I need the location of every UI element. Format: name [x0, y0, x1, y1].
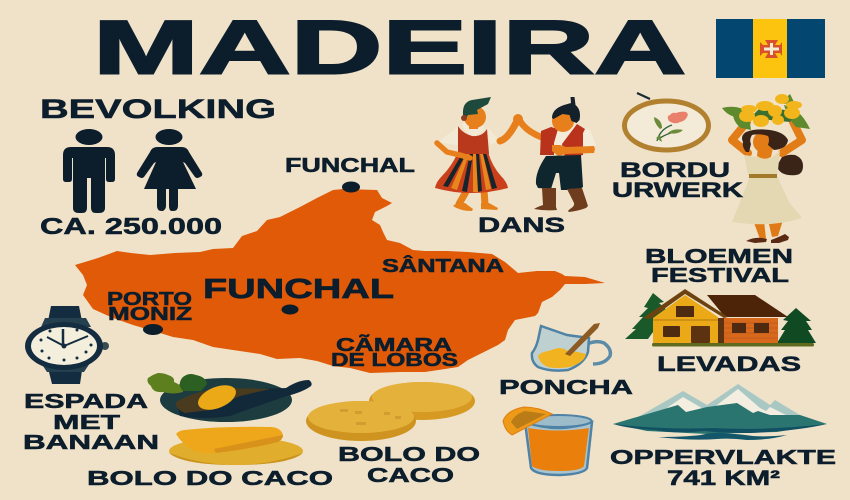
map dot: Porto Moniz — [143, 324, 163, 335]
icon: poncha jug — [532, 323, 610, 371]
icon: dancers — [435, 97, 596, 212]
label: espada met banaan: BANAAN — [23, 432, 159, 454]
map label: Camara de Lobos: CÃMARA — [336, 334, 452, 355]
map dot: Funchal — [282, 304, 298, 314]
icon: man — [63, 129, 115, 213]
icon: woman with flowers — [722, 94, 810, 243]
map label: Porto Moniz — [107, 288, 192, 324]
label: poncha: PONCHA — [499, 377, 633, 399]
icon: bolo do caco, stacked — [306, 382, 475, 441]
map: Madeira island — [75, 182, 605, 373]
label: bloemen festival: FESTIVAL — [651, 264, 789, 287]
label: oppervlakte: 741 KM² — [667, 467, 780, 490]
label: bolo do caco right: BOLO DO — [338, 443, 480, 466]
flower bouquet — [722, 94, 810, 130]
icon: flag of Madeira — [716, 19, 825, 78]
label: oppervlakte: OPPERVLAKTE — [610, 446, 836, 469]
label: espada met banaan: MET — [53, 412, 120, 434]
map label: Porto Moniz: MONIZ — [108, 303, 192, 324]
title: MADEIRA — [93, 6, 686, 90]
label: borduurwerk: URWERK — [612, 179, 743, 202]
icon: orange drink — [503, 407, 592, 475]
label: bolo do caco right: CACO — [367, 464, 454, 487]
label: espada met banaan — [23, 391, 159, 454]
label: borduurwerk — [612, 159, 743, 202]
icon: bolo do caco on plate — [169, 427, 303, 465]
label: espada met banaan: ESPADA — [24, 391, 148, 413]
map label: Camara de Lobos: DE LOBOS — [331, 350, 458, 370]
map label: Santana: SÂNTANA — [382, 255, 504, 276]
icon: mountains — [613, 384, 827, 440]
map label: Funchal: FUNCHAL — [203, 273, 394, 304]
label: bloemen festival — [645, 245, 793, 287]
label: levadas: LEVADAS — [657, 353, 801, 376]
map dot: north — [342, 182, 360, 192]
man dancer — [513, 97, 596, 212]
woman dancer — [435, 97, 517, 211]
label: bolo do caco right — [338, 443, 480, 487]
text: population figure: CA. 250.000 — [40, 213, 222, 239]
label: bolo do caco bottom: BOLO DO CACO — [87, 467, 333, 490]
label: oppervlakte — [610, 446, 836, 490]
label: dans: DANS — [478, 214, 565, 237]
icon: watch — [25, 306, 109, 384]
label: borduurwerk: BORDU — [620, 159, 730, 182]
icon: plate with espada and banana — [147, 373, 312, 422]
map label: Porto Moniz: PORTO — [107, 288, 192, 309]
label: bloemen festival: BLOEMEN — [645, 245, 793, 268]
map label: Camara de Lobos — [331, 334, 458, 370]
heading: bevolking: BEVOLKING — [40, 94, 276, 124]
label: Funchal above map: FUNCHAL — [285, 155, 415, 177]
icon: woman — [137, 129, 202, 211]
icon: house with trees — [625, 289, 816, 346]
icon: embroidery hoop — [624, 93, 708, 150]
